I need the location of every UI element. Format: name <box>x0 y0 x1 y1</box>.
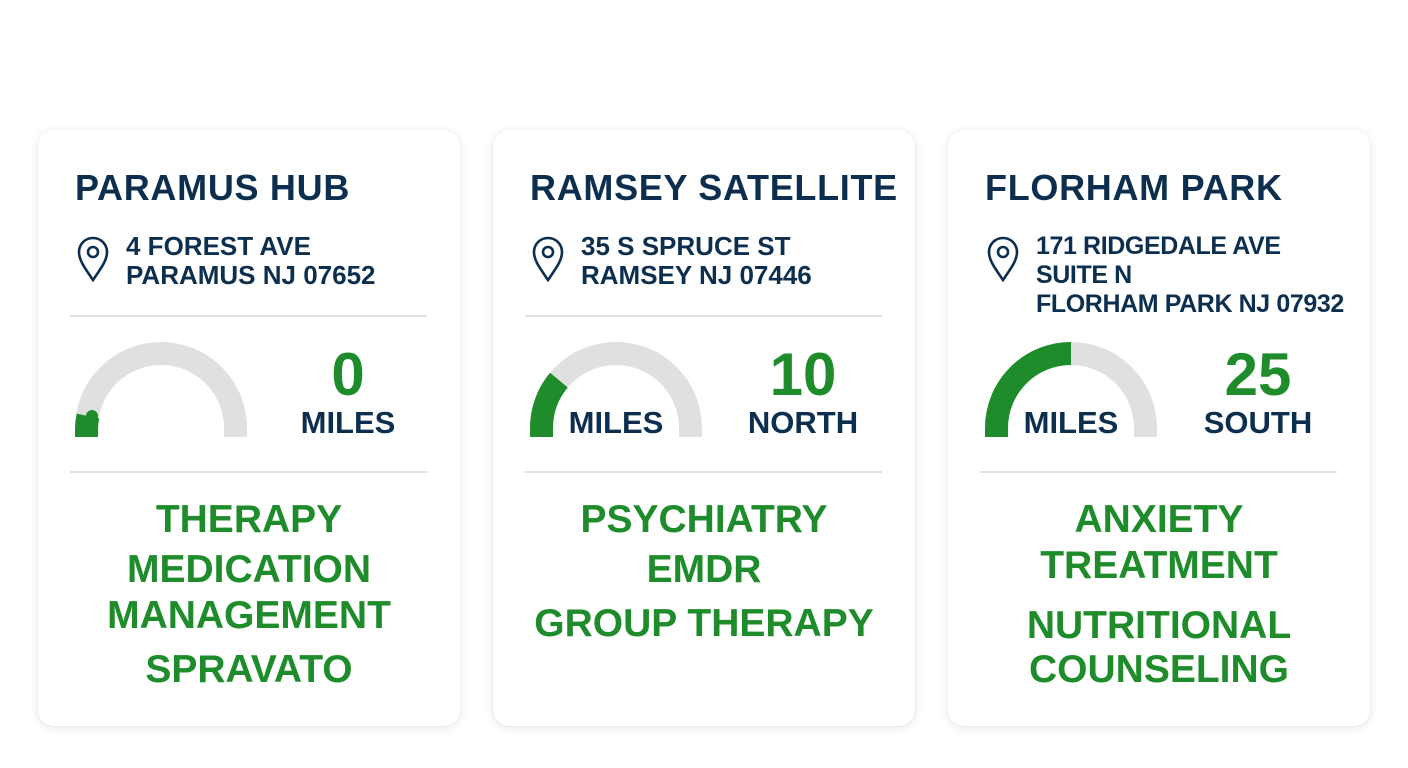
panel: Ramsey Satellite <box>493 130 915 726</box>
icon: location pin <box>988 236 1018 282</box>
gauge label: MILES <box>569 405 663 440</box>
services list: EMDR <box>647 548 761 591</box>
direction label: SOUTH <box>1204 405 1312 440</box>
address: FLORHAM PARK NJ 07932 <box>1036 290 1344 318</box>
services list: NUTRITIONAL <box>1027 604 1291 647</box>
services list <box>107 498 391 691</box>
distance value: 0 <box>331 341 365 408</box>
panel: Florham Park <box>948 130 1370 726</box>
distance value: 25 <box>1225 341 1291 408</box>
services list: MANAGEMENT <box>107 594 391 637</box>
services list: PSYCHIATRY <box>580 498 828 541</box>
gauge: 0 miles <box>75 342 247 437</box>
heading: Paramus Hub: PARAMUS HUB <box>75 167 350 208</box>
icon: location pin <box>78 236 108 282</box>
services list: THERAPY <box>156 498 342 541</box>
address <box>1036 232 1344 318</box>
services list: GROUP THERAPY <box>534 602 874 645</box>
address: 171 RIDGEDALE AVE <box>1036 232 1281 260</box>
address: 4 FOREST AVE <box>126 231 311 261</box>
address: PARAMUS NJ 07652 <box>126 260 376 290</box>
services list: ANXIETY <box>1074 498 1244 541</box>
gauge label: MILES <box>1024 405 1118 440</box>
services list: COUNSELING <box>1029 648 1289 691</box>
gauge: 25 miles <box>985 342 1157 437</box>
distance label: MILES <box>301 405 395 440</box>
address: 35 S SPRUCE ST <box>581 231 791 261</box>
icon: location pin <box>532 236 564 282</box>
services list: TREATMENT <box>1040 544 1278 587</box>
distance value: 10 <box>770 341 836 408</box>
services list <box>534 498 874 645</box>
address: RAMSEY NJ 07446 <box>581 260 812 290</box>
services list: MEDICATION <box>127 548 371 591</box>
address <box>126 231 376 290</box>
gauge: 10 miles <box>530 342 702 437</box>
address <box>581 231 812 290</box>
services list: SPRAVATO <box>145 648 353 691</box>
heading: Florham Park: FLORHAM PARK <box>985 167 1283 208</box>
direction label: NORTH <box>748 405 858 440</box>
panel: Paramus Hub <box>38 130 460 726</box>
heading: Ramsey Satellite: RAMSEY SATELLITE <box>530 167 898 208</box>
address: SUITE N <box>1036 261 1132 289</box>
services list <box>1027 498 1291 691</box>
